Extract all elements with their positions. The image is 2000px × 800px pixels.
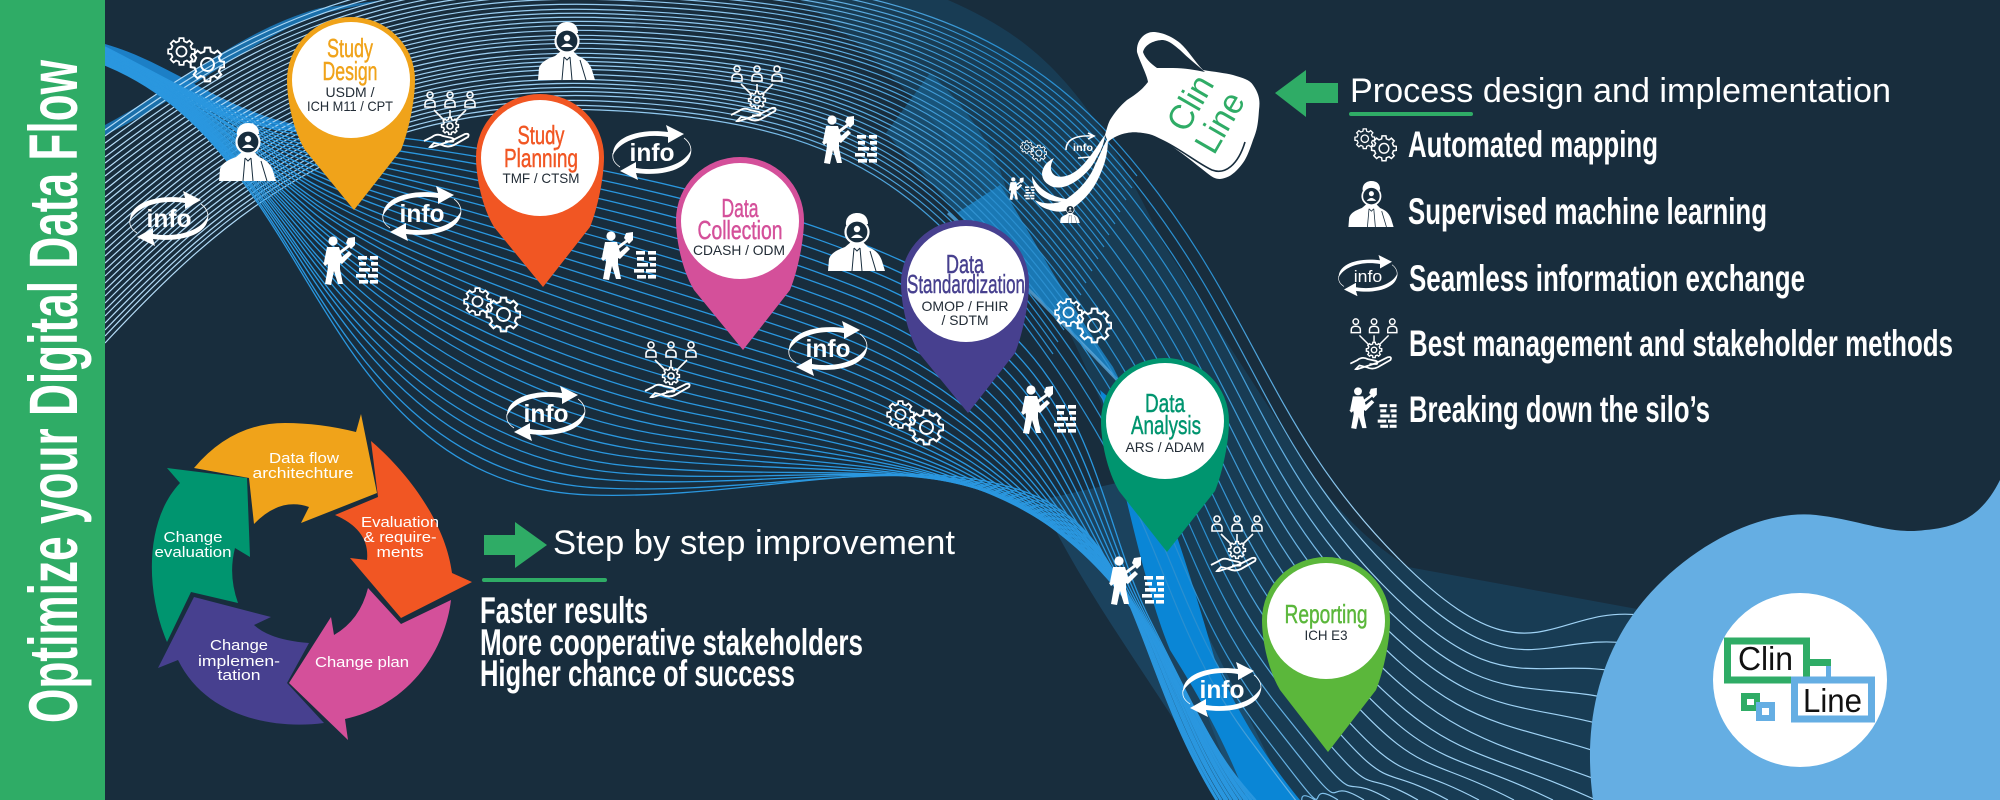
icon: stakeholders bbox=[1211, 516, 1262, 572]
pin: Study Design: USDM / bbox=[326, 84, 375, 100]
pin: Data Analysis: Analysis bbox=[1131, 410, 1201, 440]
pin: Study Design: Study bbox=[327, 33, 373, 63]
icon: silo breaker bbox=[1349, 387, 1397, 429]
icon: supervisor bbox=[828, 213, 885, 271]
icon: info: info bbox=[1354, 268, 1382, 286]
icon: stakeholders bbox=[424, 92, 475, 148]
benefits text bbox=[480, 590, 863, 694]
icon: silo breaker bbox=[822, 115, 877, 164]
jug pouring bbox=[1009, 32, 1259, 223]
cycle: data flow architecture: architechture bbox=[252, 466, 354, 482]
sidebar bbox=[0, 0, 105, 800]
icon: silo breaker bbox=[323, 236, 378, 285]
icon: supervisor bbox=[538, 22, 595, 80]
icon: gears bbox=[1355, 129, 1396, 161]
pin: Reporting bbox=[1262, 557, 1390, 752]
pin: Study Planning: TMF / CTSM bbox=[502, 170, 580, 186]
icon: info exchange: info bbox=[806, 335, 850, 363]
icon: info exchange bbox=[130, 191, 208, 246]
icon: info exchange bbox=[507, 386, 585, 441]
pin: Data Analysis: Data bbox=[1145, 388, 1185, 418]
cycle: evaluation and requirements: ments bbox=[376, 545, 424, 561]
list: process features bbox=[1339, 124, 1953, 430]
pin: Reporting: Reporting bbox=[1284, 599, 1368, 629]
icon: info exchange bbox=[613, 125, 691, 180]
pin: Data Analysis bbox=[1101, 358, 1229, 552]
blue corner blob bbox=[1590, 480, 2000, 800]
cycle: change implementation: implemen- bbox=[198, 654, 280, 670]
icon: supervisor bbox=[1348, 181, 1394, 227]
logo: Line bbox=[1803, 682, 1862, 719]
icon: silo breaker bbox=[1109, 556, 1164, 605]
item: breaking silos: Breaking down the silo’s bbox=[1409, 389, 1710, 430]
icon: supervisor bbox=[219, 123, 276, 181]
item: machine learning: Supervised machine learning bbox=[1408, 191, 1767, 232]
item: info exchange: Seamless information exchange bbox=[1409, 258, 1805, 299]
pin: Data Standardization: / SDTM bbox=[942, 312, 988, 328]
pin: Study Design: Design bbox=[322, 56, 378, 86]
icon: info bbox=[1339, 255, 1397, 296]
icon: info exchange: info bbox=[630, 139, 674, 167]
benefits text: Faster results bbox=[480, 590, 648, 631]
icon: info exchange: info bbox=[1200, 676, 1244, 704]
pin: Data Standardization: OMOP / FHIR bbox=[922, 298, 1008, 314]
pin: Study Planning bbox=[476, 94, 604, 287]
pin: Data Collection: Collection bbox=[698, 215, 782, 245]
arrow: left to jug bbox=[1275, 70, 1338, 117]
wave lines bbox=[105, 0, 1670, 800]
cycle: evaluation and requirements bbox=[335, 441, 472, 618]
jug pouring: Line bbox=[1187, 85, 1253, 160]
icon: gears bbox=[168, 38, 224, 81]
arrow: right to step by step bbox=[484, 522, 547, 568]
pin: Study Planning: Planning bbox=[504, 143, 578, 173]
icon: gears bbox=[464, 288, 520, 331]
pin: Data Collection: Data bbox=[722, 193, 759, 223]
icon: stakeholders bbox=[1350, 319, 1397, 370]
heading: step by step: Step by step improvement bbox=[553, 524, 956, 562]
cycle: change plan: Change plan bbox=[315, 655, 409, 671]
icon: gears bbox=[1055, 299, 1111, 342]
benefits text: More cooperative stakeholders bbox=[480, 622, 863, 663]
cycle: evaluation and requirements: Evaluation bbox=[361, 515, 439, 531]
cycle: change evaluation bbox=[152, 468, 250, 642]
cycle: change plan bbox=[289, 588, 451, 740]
jug pouring: Clin bbox=[1159, 68, 1222, 138]
icon: silo breaker bbox=[1021, 385, 1076, 434]
cycle: change implementation bbox=[158, 597, 324, 725]
cycle: data flow architecture bbox=[194, 414, 377, 524]
cycle diagram bbox=[152, 414, 472, 740]
icon: info exchange bbox=[1183, 662, 1261, 717]
cycle: evaluation and requirements: & require- bbox=[364, 530, 437, 546]
icon: info exchange bbox=[789, 321, 867, 376]
icon: silo breaker bbox=[601, 231, 656, 280]
pin: Study Design bbox=[287, 17, 415, 210]
pin: Reporting: ICH E3 bbox=[1304, 627, 1348, 643]
pin: Data Standardization: Standardization bbox=[907, 269, 1025, 299]
cycle: data flow architecture: Data flow bbox=[269, 451, 340, 467]
cycle: change evaluation: Change bbox=[164, 530, 222, 546]
icon: info exchange bbox=[383, 186, 461, 241]
pin: Study Design: ICH M11 / CPT bbox=[307, 98, 393, 114]
item: automated mapping: Automated mapping bbox=[1408, 124, 1658, 165]
logo bbox=[1713, 593, 1887, 767]
benefits text: Higher chance of success bbox=[480, 653, 795, 694]
heading: process design: Process design and implementation bbox=[1350, 72, 1891, 110]
pin: Data Standardization bbox=[901, 220, 1029, 413]
icon: info exchange: info bbox=[400, 200, 444, 228]
cycle: change implementation: Change bbox=[210, 638, 268, 654]
pin: Data Standardization: Data bbox=[946, 249, 984, 279]
pin: Data Collection: CDASH / ODM bbox=[693, 242, 785, 258]
heading: step by step bbox=[482, 524, 956, 582]
logo: Clin bbox=[1738, 640, 1793, 677]
pin: Study Planning: Study bbox=[518, 120, 564, 150]
icon: stakeholders bbox=[645, 342, 696, 398]
icon: info exchange: info bbox=[524, 400, 568, 428]
pin: Data Collection bbox=[676, 157, 804, 350]
pin: Data Analysis: ARS / ADAM bbox=[1126, 439, 1204, 455]
cycle: change evaluation: evaluation bbox=[154, 545, 232, 561]
cycle: change implementation: tation bbox=[218, 668, 260, 684]
icon: stakeholders bbox=[731, 66, 782, 122]
icon: gears bbox=[887, 401, 943, 444]
icon: info exchange: info bbox=[146, 205, 192, 233]
jug pouring: info bbox=[1073, 143, 1093, 154]
